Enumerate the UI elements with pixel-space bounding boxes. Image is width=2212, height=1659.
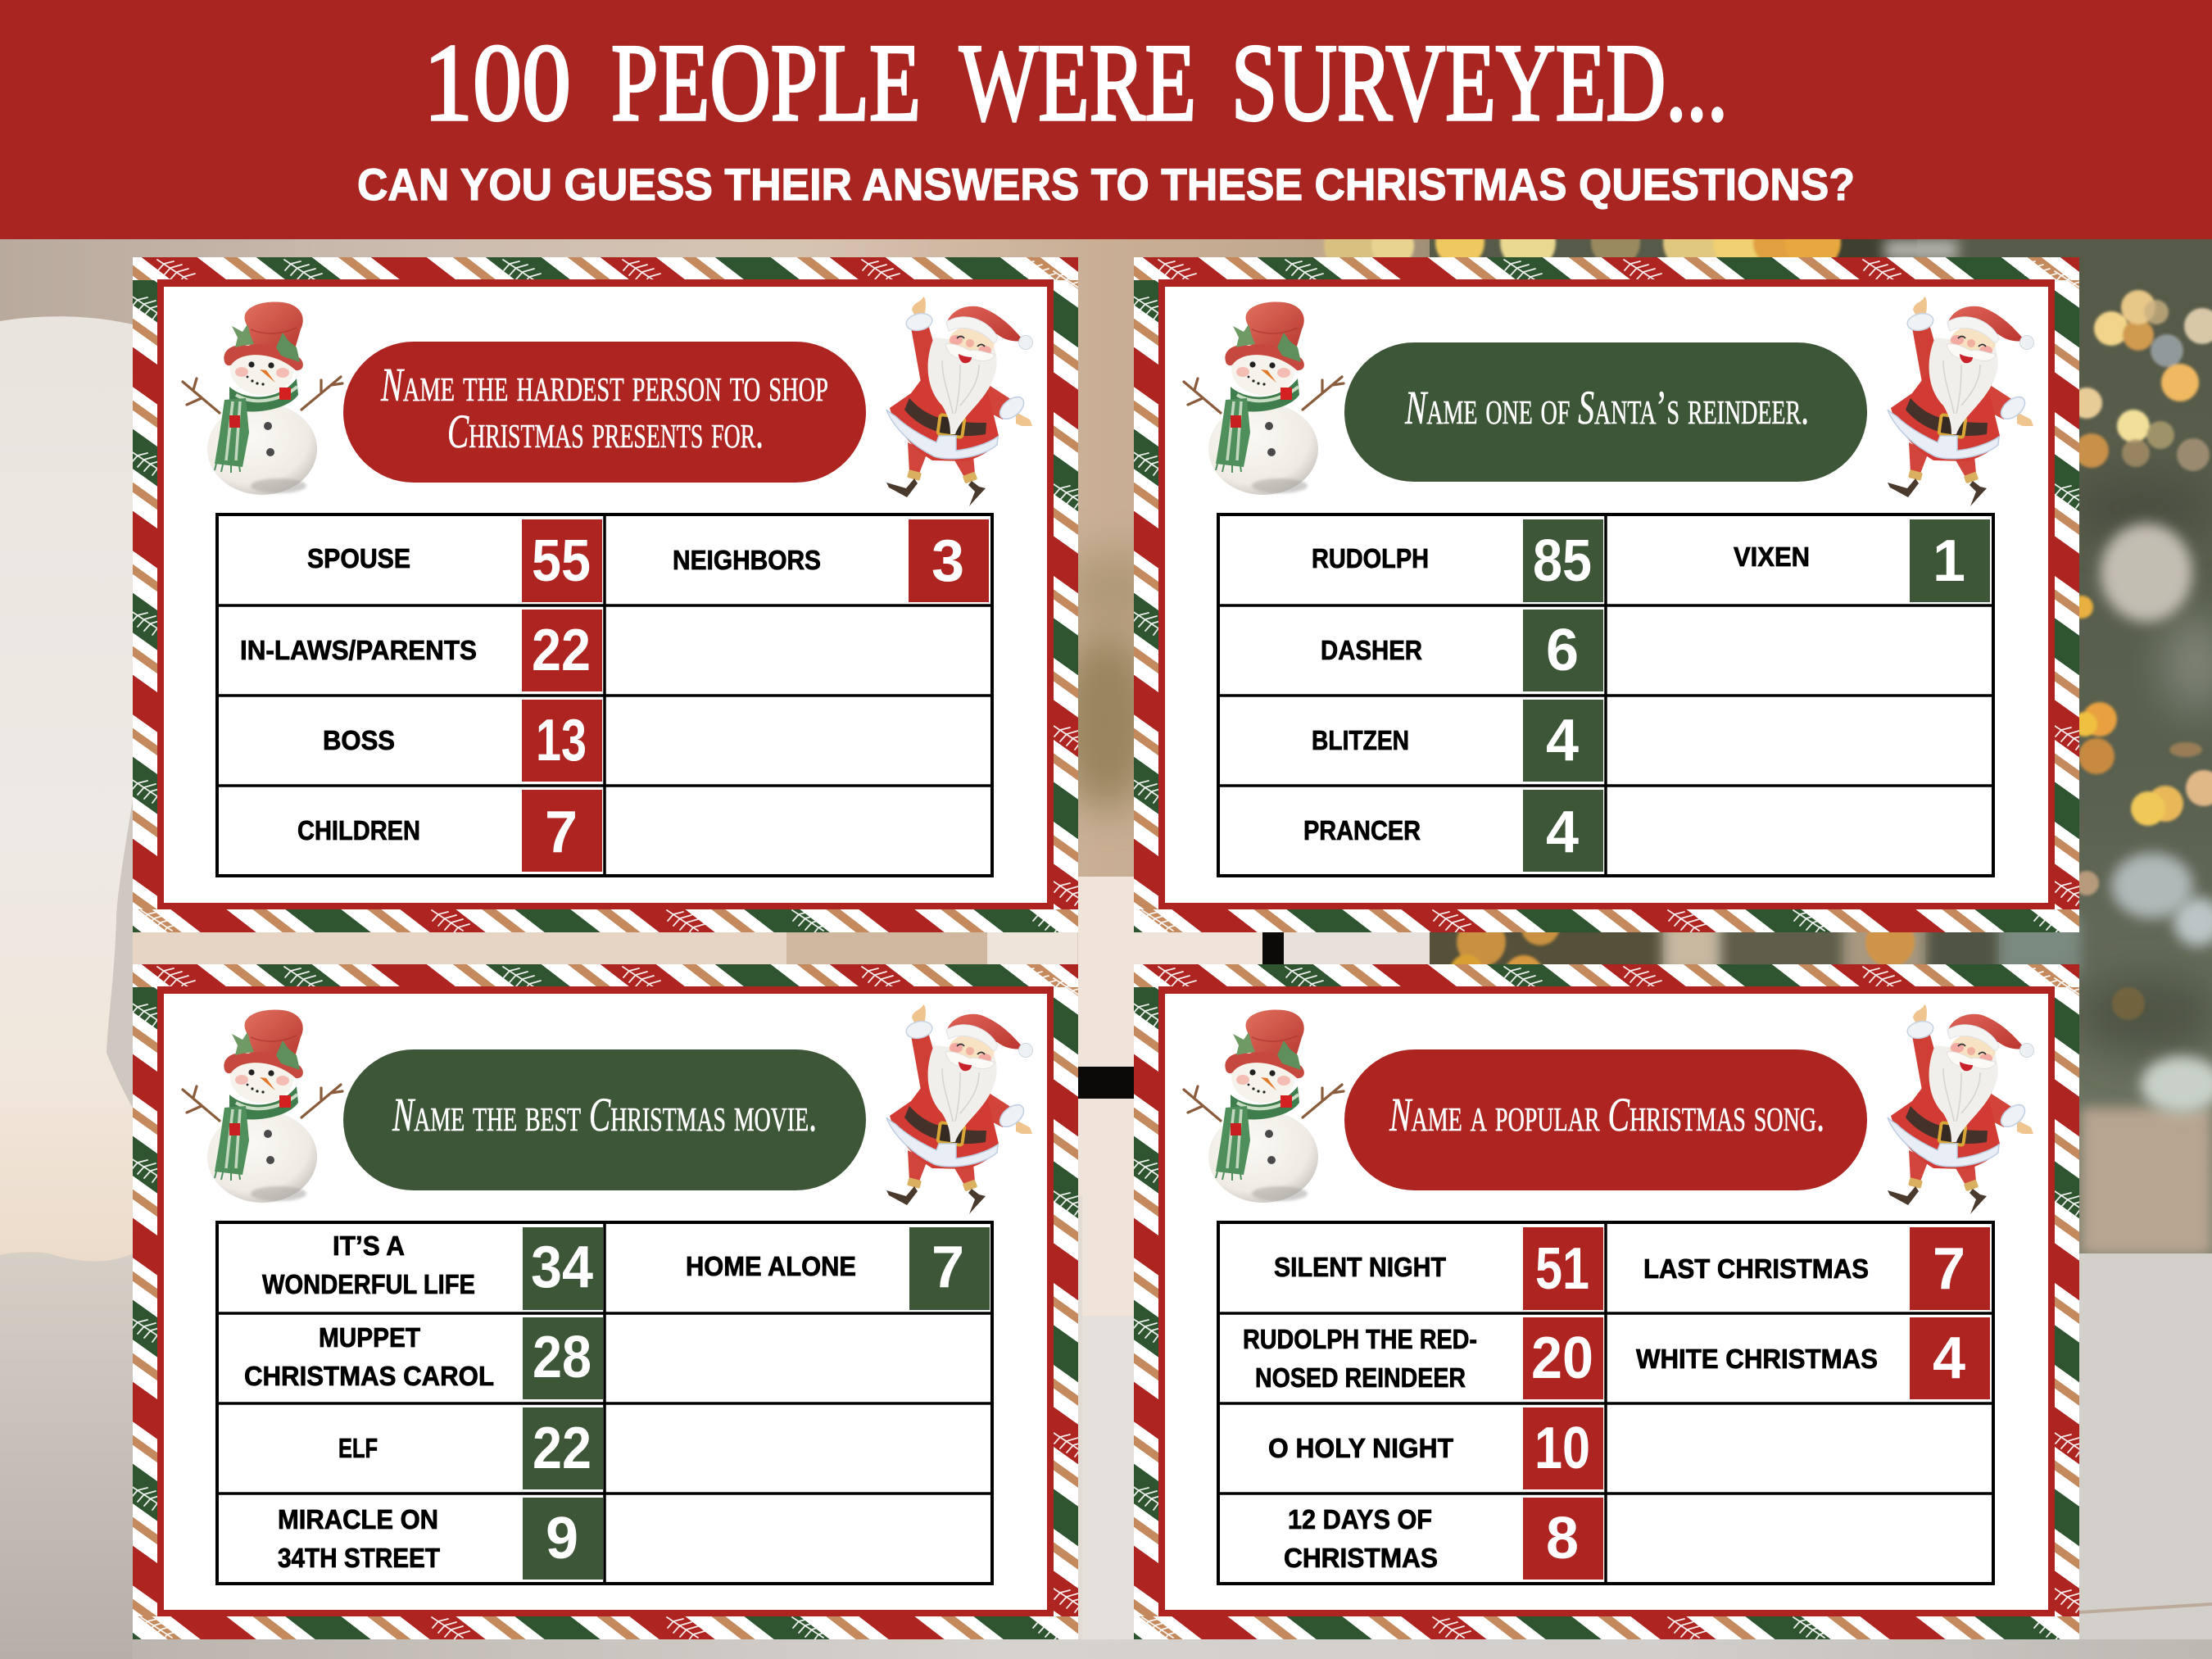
answer table: 7 <box>931 1235 964 1300</box>
answer table: PRANCER <box>1303 815 1421 845</box>
answer table: O HOLY NIGHT <box>1268 1433 1453 1463</box>
question pill: Name the hardest person to shop <box>380 358 828 411</box>
answer table: 28 <box>533 1325 592 1390</box>
answer table: NOSED REINDEER <box>1255 1362 1466 1393</box>
answer table: NEIGHBORS <box>673 545 821 575</box>
answer table <box>1218 1222 1993 1584</box>
title: SURVEYED... <box>1231 22 1728 144</box>
answer table: IT’S A <box>333 1231 405 1261</box>
answer table: SPOUSE <box>307 543 410 573</box>
icon: snowman <box>1184 1009 1344 1203</box>
icon: santa <box>1888 297 2033 506</box>
answer table: HOME ALONE <box>686 1251 856 1281</box>
answer table: 7 <box>1933 1236 1965 1302</box>
answer table: 22 <box>532 618 591 683</box>
subtitle: CAN YOU GUESS THEIR ANSWERS TO THESE CHRISTMAS QUESTIONS? <box>357 159 1855 210</box>
answer table: 6 <box>1546 618 1579 683</box>
answer table: 9 <box>546 1506 578 1571</box>
answer table: WHITE CHRISTMAS <box>1636 1344 1878 1374</box>
icon: santa <box>1888 1004 2033 1214</box>
answer table: 8 <box>1546 1506 1579 1571</box>
icon: santa <box>886 1004 1032 1214</box>
icon: snowman <box>183 301 342 495</box>
answer table: 7 <box>545 800 578 865</box>
question pill: Name a popular Christmas song. <box>1389 1088 1824 1141</box>
question pill: Name one of Santa’s reindeer. <box>1404 381 1809 434</box>
answer table <box>217 514 992 876</box>
answer table: 22 <box>533 1416 592 1481</box>
answer table: MUPPET <box>319 1322 420 1353</box>
question pill <box>343 342 866 483</box>
title: PEOPLE <box>611 22 921 144</box>
answer table: 3 <box>931 528 964 594</box>
question pill <box>1344 342 1867 482</box>
answer table: WONDERFUL LIFE <box>262 1269 475 1299</box>
answer table: RUDOLPH THE RED- <box>1243 1324 1477 1354</box>
question pill <box>343 1049 866 1190</box>
answer table: 10 <box>1534 1416 1590 1481</box>
answer table: 55 <box>532 528 591 594</box>
answer table: 51 <box>1535 1236 1589 1302</box>
answer table: IN-LAWS/PARENTS <box>240 635 477 665</box>
answer table: 4 <box>1546 800 1579 865</box>
answer table: RUDOLPH <box>1312 543 1429 573</box>
answer table: CHRISTMAS <box>1284 1543 1438 1573</box>
answer table: BOSS <box>323 725 395 755</box>
icon: santa <box>886 297 1032 506</box>
answer table: 1 <box>1933 528 1965 594</box>
answer table: 4 <box>1933 1326 1965 1391</box>
icon: snowman <box>1184 301 1344 495</box>
question pill: Christmas presents for. <box>447 405 764 458</box>
title <box>424 22 1728 144</box>
answer table <box>1218 514 1993 876</box>
panel: popular Christmas song <box>1132 964 2092 1641</box>
answer table: CHILDREN <box>297 815 420 845</box>
answer table: 34 <box>531 1235 593 1300</box>
panel: hardest person to shop for <box>131 257 1091 934</box>
answer table: 34TH STREET <box>278 1543 440 1573</box>
header banner <box>0 0 2212 239</box>
answer table: 20 <box>1531 1326 1593 1391</box>
panel: Santa's reindeer <box>1132 257 2092 934</box>
answer table: ELF <box>338 1433 378 1463</box>
answer table: MIRACLE ON <box>278 1504 438 1534</box>
answer table: LAST CHRISTMAS <box>1643 1253 1869 1284</box>
answer table: BLITZEN <box>1312 725 1409 755</box>
question pill <box>1344 1049 1867 1190</box>
answer table <box>217 1222 992 1584</box>
answer table: DASHER <box>1321 635 1422 665</box>
answer table: 13 <box>536 708 587 773</box>
answer table: 85 <box>1533 528 1592 594</box>
answer table: VIXEN <box>1734 542 1810 572</box>
question pill: Name the best Christmas movie. <box>392 1088 817 1141</box>
answer table: 12 DAYS OF <box>1288 1504 1432 1534</box>
answer table: SILENT NIGHT <box>1274 1252 1446 1282</box>
title: 100 <box>424 22 571 144</box>
answer table: CHRISTMAS CAROL <box>244 1361 494 1391</box>
panel: best Christmas movie <box>131 964 1091 1641</box>
answer table: 4 <box>1546 708 1579 773</box>
icon: snowman <box>183 1009 342 1203</box>
title: WERE <box>959 22 1196 144</box>
